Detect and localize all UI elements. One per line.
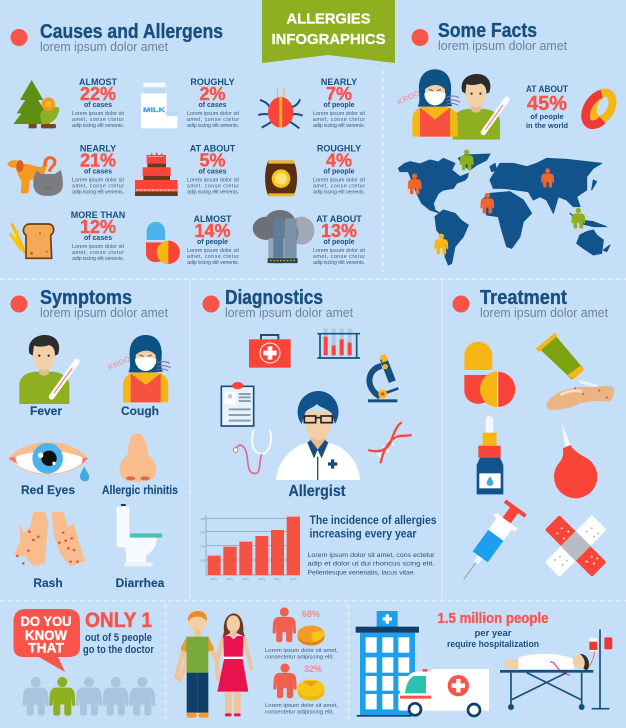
stat: 22% of cases: amet, conse ctetur <box>72 117 124 123</box>
icon: hospital building <box>356 611 419 717</box>
chart: bar chart of allergy incidence: 2013 <box>258 577 265 581</box>
stat: 32% <box>265 663 338 716</box>
stat: 5% of cases: adip iscing elit venenis. <box>187 190 239 196</box>
illustration: doctor <box>276 391 360 480</box>
stat: 13% of people: amet, conse ctetur <box>313 254 365 260</box>
stat: 13% of people: of people <box>323 239 355 246</box>
label: cough: Cough <box>121 404 159 418</box>
stat: 12% of cases: Lorem ipsum dolor sit <box>72 244 125 250</box>
stat: 14% of people: adip iscing elit venenis. <box>187 260 239 266</box>
stat: 5% of cases: Lorem ipsum dolor sit <box>187 178 240 184</box>
hospital art <box>356 611 612 717</box>
label: fever: Fever <box>30 404 62 418</box>
stat: 2% of cases: of cases <box>198 102 227 109</box>
heading: symptoms: lorem ipsum dolor amet <box>40 305 168 320</box>
stat: 12% of cases <box>71 210 125 262</box>
stat: 21% of cases: 21% <box>80 150 116 170</box>
stat: 13% of people: AT ABOUT <box>316 214 362 224</box>
stat: 14% of people: amet, conse ctetur <box>187 254 239 260</box>
illustration: patient on stretcher with drip <box>500 629 612 710</box>
heading: treatment: lorem ipsum dolor amet <box>480 305 608 320</box>
illustration: sick man and woman <box>396 69 507 140</box>
stat: 12% of cases: of cases <box>84 235 112 242</box>
stat: 22% of cases: 22% <box>80 84 116 104</box>
stat: 2% of cases: adip iscing elit venenis. <box>187 123 239 129</box>
icon: syringe <box>453 499 527 588</box>
icons: allergens <box>7 80 314 264</box>
chart: bar chart of allergy incidence: 2012 <box>242 577 249 581</box>
heading: causes and allergens <box>10 21 223 54</box>
text block: incidence of allergies: The incidence of allergies <box>310 513 437 527</box>
icon: pills <box>464 342 515 407</box>
stat: only 1 out of 5: ONLY 1 <box>85 609 152 632</box>
heading: causes and allergens: lorem ipsum dolor amet <box>40 39 168 54</box>
stat: 5% of cases: of cases <box>198 168 227 176</box>
stat: 5% of cases <box>187 144 240 196</box>
icon: bandage <box>545 515 607 577</box>
stat: 45% of people in the world: AT ABOUT <box>526 84 568 94</box>
icon: wheat and bread <box>10 223 54 258</box>
icon: microscope <box>368 355 398 402</box>
callout: do you know that <box>14 609 80 672</box>
pictogram: five people <box>23 677 155 716</box>
panel: causes and allergens <box>7 21 366 266</box>
stat: 14% of people <box>187 214 240 266</box>
stat: 32%: consectetur adipiscing elit. <box>265 710 334 716</box>
callout: do you know that: DO YOU <box>20 613 72 629</box>
heading: diagnostics: lorem ipsum dolor amet <box>225 305 353 320</box>
stat: 12% of cases: adip iscing elit venenis. <box>72 256 124 262</box>
text: 1.5 million people <box>438 610 548 650</box>
icon: ambulance <box>399 669 489 716</box>
stat: 5% of cases: 5% <box>199 150 226 170</box>
panel: hospitalization <box>356 610 612 717</box>
stat: 32%: 32% <box>304 664 322 674</box>
stat: 14% of people: of people <box>197 239 228 246</box>
illustration: couple <box>176 611 252 718</box>
label: diarrhea: Diarrhea <box>116 576 165 590</box>
chart: bar chart of allergy incidence: 2014 <box>274 577 281 581</box>
stat: 21% of cases <box>72 144 125 196</box>
stat: 13% of people: Lorem ipsum dolor sit <box>313 248 366 254</box>
chart: bar chart of allergy incidence: 2010 <box>211 577 218 581</box>
label: allergist: Allergist <box>288 483 346 500</box>
stat: 7% of people: Lorem ipsum dolor sit <box>313 111 366 117</box>
treatment art <box>453 333 614 588</box>
stat: 4% of people: 4% <box>326 150 352 170</box>
heading: causes and allergens: Causes and Allergens <box>40 21 223 43</box>
icon: tree and flower <box>13 80 59 128</box>
stat: 68%: consectetur adipiscing elit. <box>265 654 334 660</box>
stat: 22% of cases <box>72 77 125 129</box>
icon: dust mite bug <box>258 88 303 128</box>
stat: 14% of people: Lorem ipsum dolor sit <box>187 248 240 254</box>
icon: nose <box>120 433 156 482</box>
stat: 45% of people in the world <box>526 84 568 130</box>
icon: first aid kit <box>249 335 291 368</box>
icon: bag of pollen <box>265 161 297 196</box>
stat: 5% of cases: amet, conse ctetur <box>187 184 239 190</box>
text block: incidence of allergies: Pellentesque venenatis, lacus vitae. <box>308 570 416 576</box>
stat: 68%: Lorem ipsum dolor sit amet, <box>265 648 338 654</box>
chart: bar chart of allergy incidence: 400 <box>200 517 205 521</box>
heading: treatment: Treatment <box>480 287 567 309</box>
icon: test tubes <box>317 328 360 358</box>
heading: some facts: Some Facts <box>438 20 537 42</box>
stat: 21% of cases: of cases <box>84 168 112 176</box>
icon: fever man <box>19 335 77 404</box>
label: rash: Rash <box>33 576 63 590</box>
stat: only 1 out of 5 <box>83 609 155 656</box>
icon: smog and factory <box>253 210 314 263</box>
panel: some facts <box>396 20 616 265</box>
chart: bar chart of allergy incidence: 300 <box>200 530 205 534</box>
stat: 2% of cases <box>187 77 240 129</box>
stat: 21% of cases: Lorem ipsum dolor sit <box>72 178 125 184</box>
icon: clipboard <box>221 382 254 426</box>
stat: 21% of cases: NEARLY <box>80 144 116 154</box>
map markers <box>408 150 585 254</box>
stat: 2% of cases: Lorem ipsum dolor sit <box>187 111 240 117</box>
stat: 22% of cases: adip iscing elit venenis. <box>72 123 124 129</box>
stat: only 1 out of 5: out of 5 people <box>85 632 152 644</box>
icon: medicine capsule <box>146 222 180 264</box>
icon: stethoscope <box>233 430 271 473</box>
stat: only 1 out of 5: go to the doctor <box>83 644 155 656</box>
stat: 22% of cases: of cases <box>84 102 112 109</box>
stat: 2% of cases: ROUGHLY <box>190 77 235 87</box>
text: 1.5 million people: per year <box>475 628 512 639</box>
icon: ring chart <box>586 90 616 125</box>
stat: 21% of cases: adip iscing elit venenis. <box>72 190 124 196</box>
panel: treatment <box>452 287 614 588</box>
stat: 4% of people: ROUGHLY <box>317 144 361 154</box>
callout: do you know that: THAT <box>28 640 64 656</box>
heading: diagnostics: Diagnostics <box>225 287 323 309</box>
stat: 7% of people: amet, conse ctetur <box>313 117 365 123</box>
panel: gender statistics <box>176 607 338 718</box>
icon: cake <box>135 153 178 196</box>
chart: bar chart of allergy incidence: 2011 <box>227 577 234 581</box>
text block: incidence of allergies: adip et dolor ut dui rhoncus scing elit. <box>308 560 435 568</box>
text: 1.5 million people: require hospitalization <box>447 639 539 650</box>
icon: coughing woman <box>106 335 171 402</box>
panel: symptoms <box>8 287 178 590</box>
stat: 5% of cases: AT ABOUT <box>190 144 236 154</box>
stat: 45% of people in the world: 45% <box>527 93 567 115</box>
stat: 22% of cases: ALMOST <box>79 77 117 87</box>
stat: 4% of people: amet, conse ctetur <box>313 184 365 190</box>
text block: incidence of allergies: increasing every year <box>310 526 417 540</box>
stat: 32%: Lorem ipsum dolor sit amet, <box>265 703 338 709</box>
label: red eyes: Red Eyes <box>21 483 75 497</box>
heading: symptoms: Symptoms <box>40 287 132 309</box>
chart: bar chart of allergy incidence: 100 <box>200 559 205 563</box>
heading: treatment <box>452 287 608 320</box>
chart: bar chart of allergy incidence <box>200 515 300 581</box>
stat: 14% of people: 14% <box>194 221 231 241</box>
stat: 22% of cases: Lorem ipsum dolor sit <box>72 111 125 117</box>
stat: 13% of people <box>313 214 366 266</box>
stat: 68%: 68% <box>302 609 320 619</box>
panel: did you know <box>14 609 155 716</box>
icon: ointment on hand <box>536 333 614 410</box>
heading: symptoms <box>10 287 168 320</box>
stat: 12% of cases: 12% <box>80 217 116 237</box>
world map <box>398 154 610 265</box>
icon: rash hands <box>14 512 85 566</box>
stat: 45% of people in the world: in the world <box>526 121 568 130</box>
stat: 7% of people <box>313 77 366 129</box>
heading: diagnostics <box>202 287 353 320</box>
text block: incidence of allergies: Lorem ipsum dolor sit amet, cons ectetur <box>308 552 435 559</box>
stat: 21% of cases: amet, conse ctetur <box>72 184 124 190</box>
stat: 7% of people: 7% <box>326 84 352 104</box>
stat: 7% of people: of people <box>323 102 355 109</box>
stat: 14% of people: ALMOST <box>194 214 232 224</box>
stat: 68% <box>265 607 338 660</box>
panel: diagnostics <box>200 287 437 581</box>
stat: 7% of people: adip iscing elit venenis. <box>313 123 365 129</box>
callout: do you know that: KNOW <box>25 627 68 643</box>
heading: some facts <box>412 20 567 53</box>
icon: milk: MILK <box>143 107 166 114</box>
icon: dog and cat <box>7 158 63 196</box>
symptom art <box>8 335 171 566</box>
text block: incidence of allergies <box>308 513 437 576</box>
label: allergic rhinitis: Allergic rhinitis <box>102 483 178 497</box>
icon: dna <box>368 422 412 463</box>
stat: 7% of people: NEARLY <box>321 77 357 87</box>
title banner <box>262 0 395 63</box>
heading: some facts: lorem ipsum dolor amet <box>438 38 567 53</box>
icon: red eye <box>8 442 89 481</box>
icon: rubber bulb <box>554 423 597 498</box>
stat: 4% of people: adip iscing elit venenis. <box>313 190 365 196</box>
title banner: INFOGRAPHICS <box>272 31 386 48</box>
icon: eye drops bottle <box>477 416 503 494</box>
stat: 4% of people: Lorem ipsum dolor sit <box>313 178 366 184</box>
stat: 2% of cases: amet, conse ctetur <box>187 117 239 123</box>
icon: milk <box>141 83 178 128</box>
people and world map art <box>396 69 616 265</box>
chart: bar chart of allergy incidence: 2015 <box>290 577 297 581</box>
stat: 12% of cases: MORE THAN <box>71 210 125 220</box>
stat: 13% of people: adip iscing elit venenis. <box>313 260 365 266</box>
icon: toilet <box>117 504 162 566</box>
stat: 13% of people: 13% <box>321 221 357 241</box>
diagnostics art <box>200 328 412 581</box>
text: 1.5 million people: 1.5 million people <box>438 610 548 627</box>
stat: 2% of cases: 2% <box>199 84 226 104</box>
chart: bar chart of allergy incidence: 200 <box>200 544 205 548</box>
stat: 4% of people <box>313 144 366 196</box>
stat: 45% of people in the world: of people <box>530 112 564 121</box>
stat: 12% of cases: amet, conse ctetur <box>72 250 124 256</box>
stat: 4% of people: of people <box>323 168 355 176</box>
title banner: ALLERGIES <box>286 10 370 28</box>
